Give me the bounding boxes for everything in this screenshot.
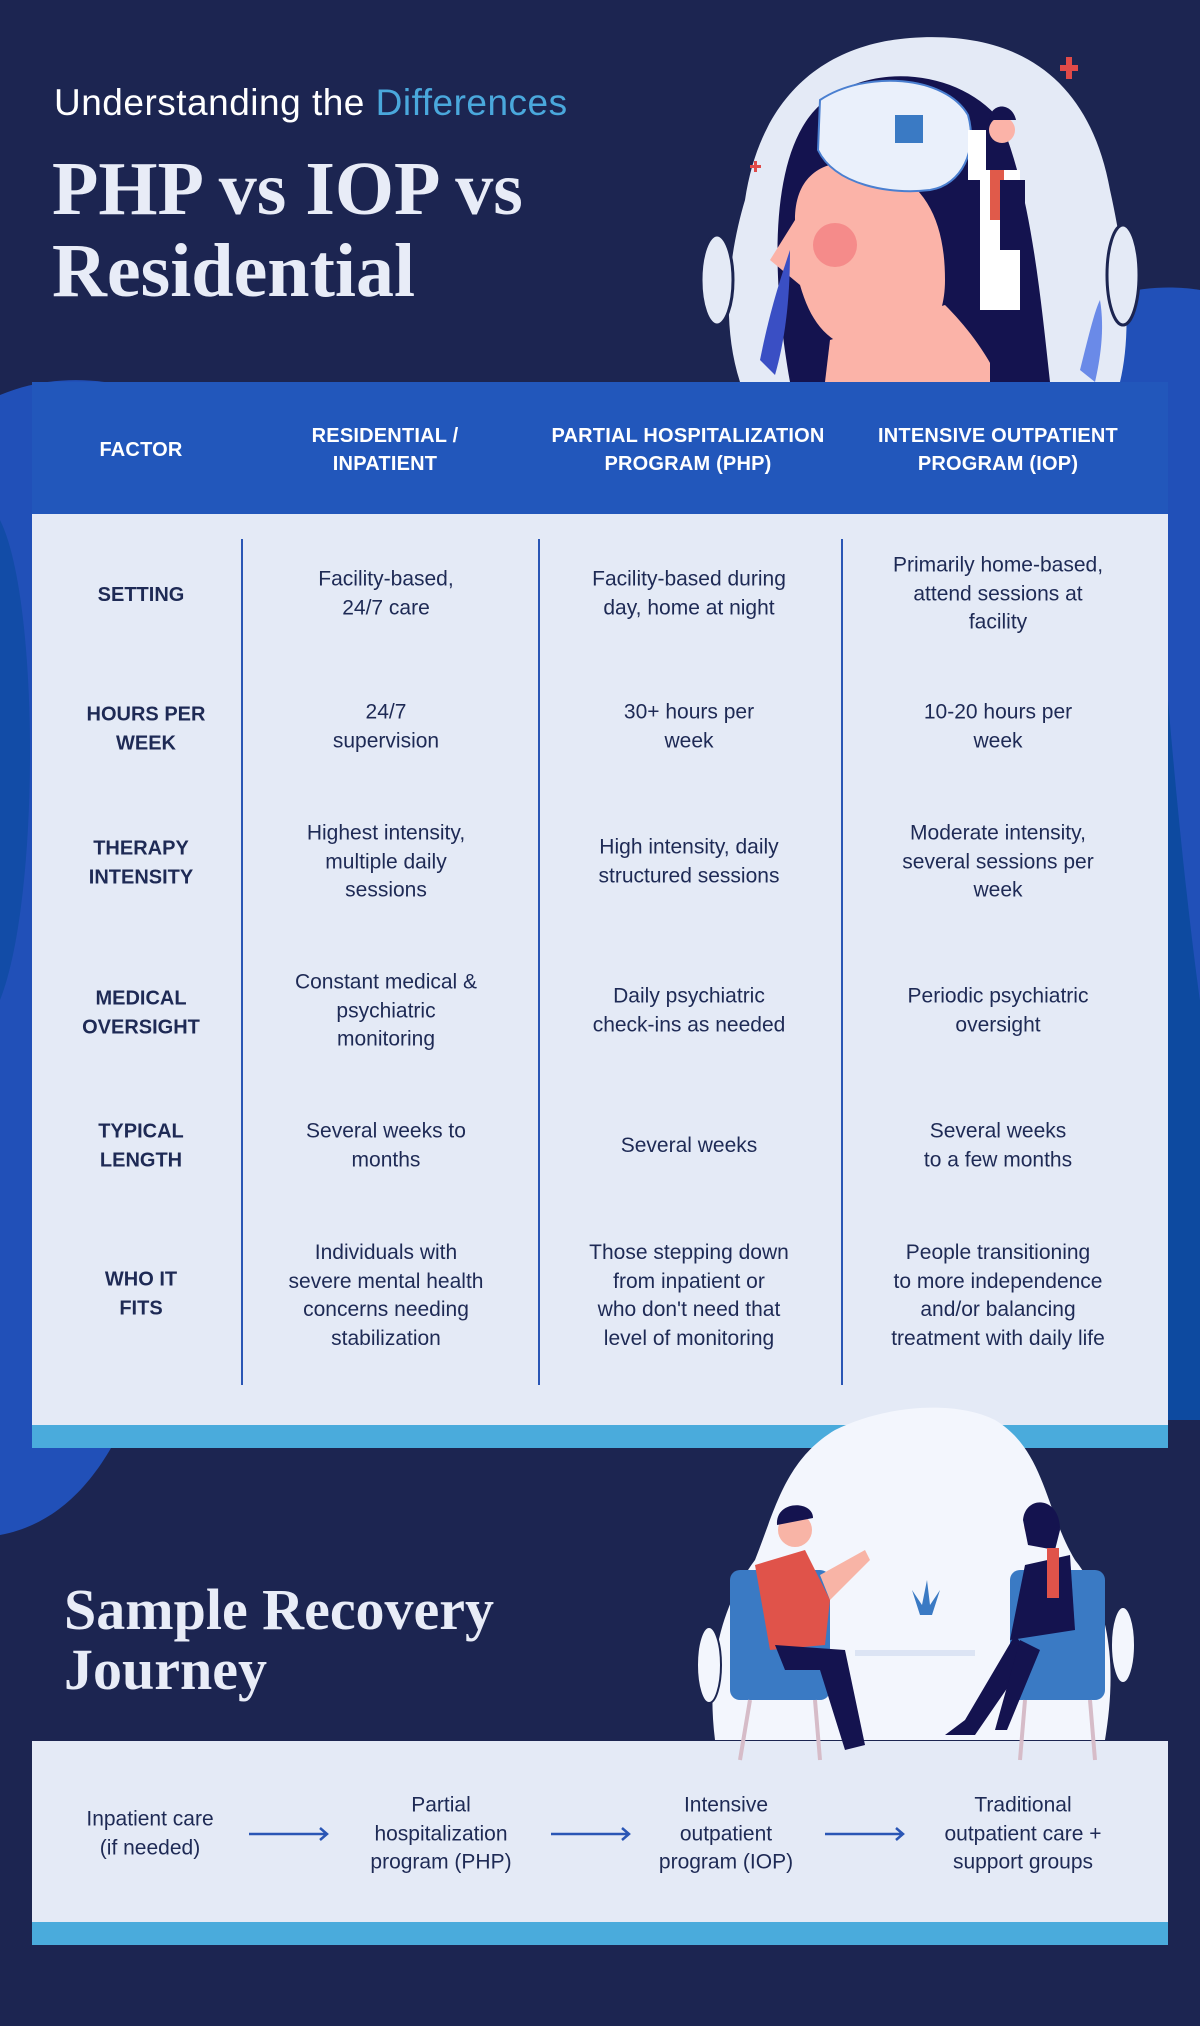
table header xyxy=(32,382,1168,514)
text: People transitioning xyxy=(906,1241,1090,1264)
journey step 4: outpatient care + xyxy=(944,1822,1102,1845)
text: WEEK xyxy=(116,732,176,754)
title: Residential xyxy=(52,229,415,313)
journey step 2 xyxy=(370,1793,512,1873)
text: HOURS PER xyxy=(87,704,205,726)
journey step 2: program (PHP) xyxy=(370,1850,512,1873)
journey step 2: hospitalization xyxy=(374,1822,508,1845)
text: week xyxy=(973,729,1023,752)
text: multiple daily xyxy=(325,850,447,873)
text: Facility-based, xyxy=(318,568,454,590)
table header: PARTIAL HOSPITALIZATION xyxy=(551,425,825,447)
row: setting xyxy=(98,553,1103,633)
text: 10-20 hours per xyxy=(924,700,1072,724)
journey step 4: support groups xyxy=(953,1850,1093,1873)
journey step 1: (if needed) xyxy=(100,1836,200,1859)
text: 24/7 care xyxy=(342,596,430,619)
arrow 2 xyxy=(551,1827,631,1841)
text: psychiatric xyxy=(336,999,436,1022)
text: facility xyxy=(969,610,1027,633)
section heading: Sample Recovery Journey: Sample Recovery xyxy=(64,1577,494,1642)
table header: PROGRAM (PHP) xyxy=(604,453,772,475)
text: Constant medical & xyxy=(295,970,477,993)
table header: INPATIENT xyxy=(333,453,437,475)
text: and/or balancing xyxy=(920,1298,1076,1321)
text: to more independence xyxy=(894,1270,1102,1292)
text: concerns needing xyxy=(303,1298,469,1321)
row: who it fits xyxy=(104,1241,1105,1350)
arrow 3 xyxy=(825,1827,905,1841)
text: Primarily home-based, xyxy=(893,553,1103,576)
row: therapy intensity xyxy=(89,821,1094,901)
text: Several weeks xyxy=(621,1134,757,1157)
journey panel xyxy=(32,1741,1168,1945)
text: day, home at night xyxy=(603,596,775,619)
text: WHO IT xyxy=(105,1268,177,1290)
text: Several weeks to xyxy=(306,1120,466,1142)
text: severe mental health xyxy=(289,1270,483,1292)
title xyxy=(52,147,523,313)
table header: FACTOR xyxy=(99,439,183,461)
text: TYPICAL xyxy=(98,1120,184,1142)
journey step 2: Partial xyxy=(411,1793,471,1816)
text: check-ins as needed xyxy=(593,1013,785,1036)
text: structured sessions xyxy=(599,864,779,887)
text: Moderate intensity, xyxy=(910,821,1086,844)
table header: PROGRAM (IOP) xyxy=(918,453,1078,475)
journey step 4: Traditional xyxy=(974,1793,1072,1816)
text: week xyxy=(973,878,1023,901)
text: FITS xyxy=(119,1297,163,1319)
section heading: Sample Recovery Journey xyxy=(64,1577,494,1702)
text: who don't need that xyxy=(598,1298,780,1321)
text: months xyxy=(352,1148,420,1171)
arrow 1 xyxy=(249,1827,329,1841)
text: Facility-based during xyxy=(592,568,786,590)
journey step 3: Intensive xyxy=(684,1793,768,1816)
text: High intensity, daily xyxy=(599,836,779,858)
text: INTENSITY xyxy=(89,866,193,888)
text: supervision xyxy=(333,729,439,752)
text: Several weeks xyxy=(930,1120,1066,1142)
journey step 3: outpatient xyxy=(680,1822,772,1845)
row: medical oversight xyxy=(82,970,1088,1050)
text: sessions xyxy=(345,878,427,901)
journey step 1 xyxy=(86,1808,214,1859)
row: hours xyxy=(87,700,1072,754)
text: Those stepping down xyxy=(589,1241,789,1264)
text: stabilization xyxy=(331,1326,441,1350)
text: treatment with daily life xyxy=(891,1326,1105,1350)
text: OVERSIGHT xyxy=(82,1016,200,1038)
text: 24/7 xyxy=(366,700,406,724)
text: SETTING xyxy=(98,584,184,606)
journey step 3: program (IOP) xyxy=(659,1850,793,1873)
row: typical length xyxy=(98,1120,1072,1171)
text: week xyxy=(664,729,714,752)
journey step 4 xyxy=(944,1793,1102,1873)
illustration: therapy session xyxy=(698,1408,1134,1760)
illustration: head with puzzle brain and doctor xyxy=(702,37,1140,382)
text: from inpatient or xyxy=(613,1270,765,1292)
text: monitoring xyxy=(337,1027,435,1050)
title: PHP vs IOP vs xyxy=(52,147,523,231)
text: attend sessions at xyxy=(913,582,1083,605)
text: 30+ hours per xyxy=(624,700,754,724)
comparison table xyxy=(32,382,1168,1448)
bottom strip xyxy=(32,1425,1168,1448)
text: Daily psychiatric xyxy=(613,984,765,1008)
table header: INTENSIVE OUTPATIENT xyxy=(878,425,1118,447)
text: several sessions per xyxy=(902,850,1094,873)
text: oversight xyxy=(955,1013,1041,1036)
journey step 3 xyxy=(659,1793,793,1873)
subtitle: Understanding the Differences xyxy=(54,82,568,123)
section heading: Sample Recovery Journey: Journey xyxy=(64,1637,267,1702)
text: Individuals with xyxy=(315,1241,457,1264)
text: Periodic psychiatric xyxy=(908,984,1088,1008)
text: level of monitoring xyxy=(604,1326,774,1350)
text: Highest intensity, xyxy=(307,821,465,844)
text: LENGTH xyxy=(100,1149,182,1171)
text: THERAPY xyxy=(93,838,189,860)
text: MEDICAL xyxy=(95,988,187,1010)
table header: RESIDENTIAL / xyxy=(312,425,458,447)
text: to a few months xyxy=(924,1148,1072,1171)
journey step 1: Inpatient care xyxy=(86,1808,214,1830)
